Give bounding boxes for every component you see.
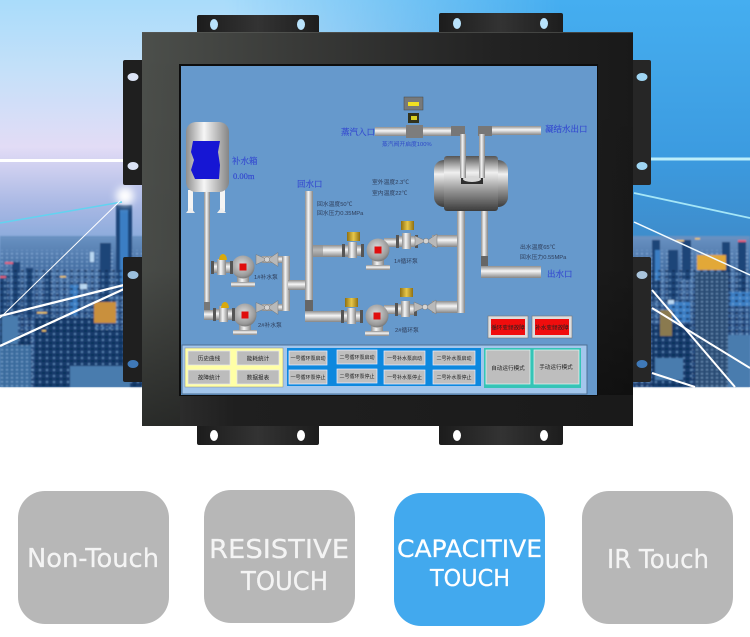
- pipe labels: 回水口: [297, 179, 323, 189]
- pipe labels: 凝结水出口: [545, 124, 588, 134]
- piping: [204, 191, 541, 322]
- readings: 回水压力0.55MPa: [520, 253, 567, 261]
- metal frame: [142, 32, 633, 426]
- city skyline: [0, 205, 750, 387]
- pump start and stop buttons: [287, 348, 481, 386]
- pumps and valves: [211, 221, 437, 336]
- monitor: [123, 13, 651, 445]
- supply tank labels: [232, 156, 258, 181]
- fault alarms: 循环变频故障: [491, 324, 525, 332]
- statistics buttons: 数据报表: [247, 374, 270, 382]
- light glow on tower: [116, 187, 134, 205]
- readings: 2#补水泵: [258, 321, 282, 329]
- pump start and stop buttons: 二号循环泵启动: [339, 354, 375, 361]
- supply tank labels: 补水箱: [232, 156, 258, 166]
- pump start and stop buttons: 二号补水泵停止: [436, 374, 472, 381]
- statistics buttons: 历史曲线: [198, 354, 221, 362]
- background: city skyline photo: [0, 0, 750, 387]
- steam inlet and condensate pipes: [375, 97, 541, 182]
- pipe labels: 蒸汽入口: [341, 127, 375, 137]
- card: Capacitive Touch: TOUCH: [429, 566, 510, 592]
- readings: 室外温度2.3℃: [372, 178, 409, 186]
- card: Non-Touch: Non-Touch: [27, 544, 159, 574]
- pump start and stop buttons: 一号补水泵启动: [387, 355, 422, 362]
- readings: 出水温度65℃: [520, 243, 556, 251]
- statistics buttons: 能耗统计: [247, 354, 270, 362]
- readings: 1#循环泵: [394, 257, 418, 265]
- pump start and stop buttons: 二号循环泵停止: [339, 373, 375, 380]
- card: IR Touch: IR Touch: [607, 545, 709, 575]
- pipe labels: [297, 124, 588, 279]
- card: Capacitive Touch: [394, 493, 545, 626]
- run mode buttons: 自动运行模式: [491, 364, 525, 372]
- pump start and stop buttons: 一号补水泵停止: [387, 374, 422, 381]
- supply tank labels: 0.00m: [233, 171, 255, 181]
- heat exchanger drum: [434, 134, 508, 211]
- light beams: [0, 159, 750, 387]
- pipe labels: 蒸汽阀开启度100%: [382, 140, 432, 148]
- card: Capacitive Touch: CAPACITIVE: [397, 535, 542, 563]
- screen: [179, 64, 598, 396]
- card: Resistive Touch: TOUCH: [240, 567, 328, 597]
- readings: 2#循环泵: [395, 326, 419, 334]
- fault alarms: [488, 316, 572, 338]
- control bar: [182, 345, 587, 394]
- pump start and stop buttons: 一号循环泵启动: [290, 355, 326, 362]
- pipe labels: 出水口: [547, 269, 573, 279]
- pump start and stop buttons: 二号补水泵启动: [436, 355, 472, 362]
- supply water tank: [186, 122, 229, 213]
- readings: 室内温度22℃: [372, 189, 408, 197]
- card: Resistive Touch: RESISTIVE: [209, 535, 349, 565]
- run mode buttons: [484, 348, 581, 388]
- card: Resistive Touch: [204, 490, 355, 623]
- pump start and stop buttons: 一号循环泵停止: [290, 374, 326, 381]
- card: IR Touch: [582, 491, 733, 624]
- readings: [254, 178, 567, 334]
- readings: 1#补水泵: [254, 273, 278, 281]
- mounting brackets: [123, 13, 651, 445]
- card: Non-Touch: [18, 491, 169, 624]
- readings: 回水温度50℃: [317, 200, 353, 208]
- run mode buttons: 手动运行模式: [539, 363, 573, 371]
- statistics buttons: [185, 348, 283, 387]
- statistics buttons: 故障统计: [198, 374, 221, 382]
- fault alarms: 补水变频故障: [535, 324, 569, 332]
- readings: 回水压力0.35MPa: [317, 209, 364, 217]
